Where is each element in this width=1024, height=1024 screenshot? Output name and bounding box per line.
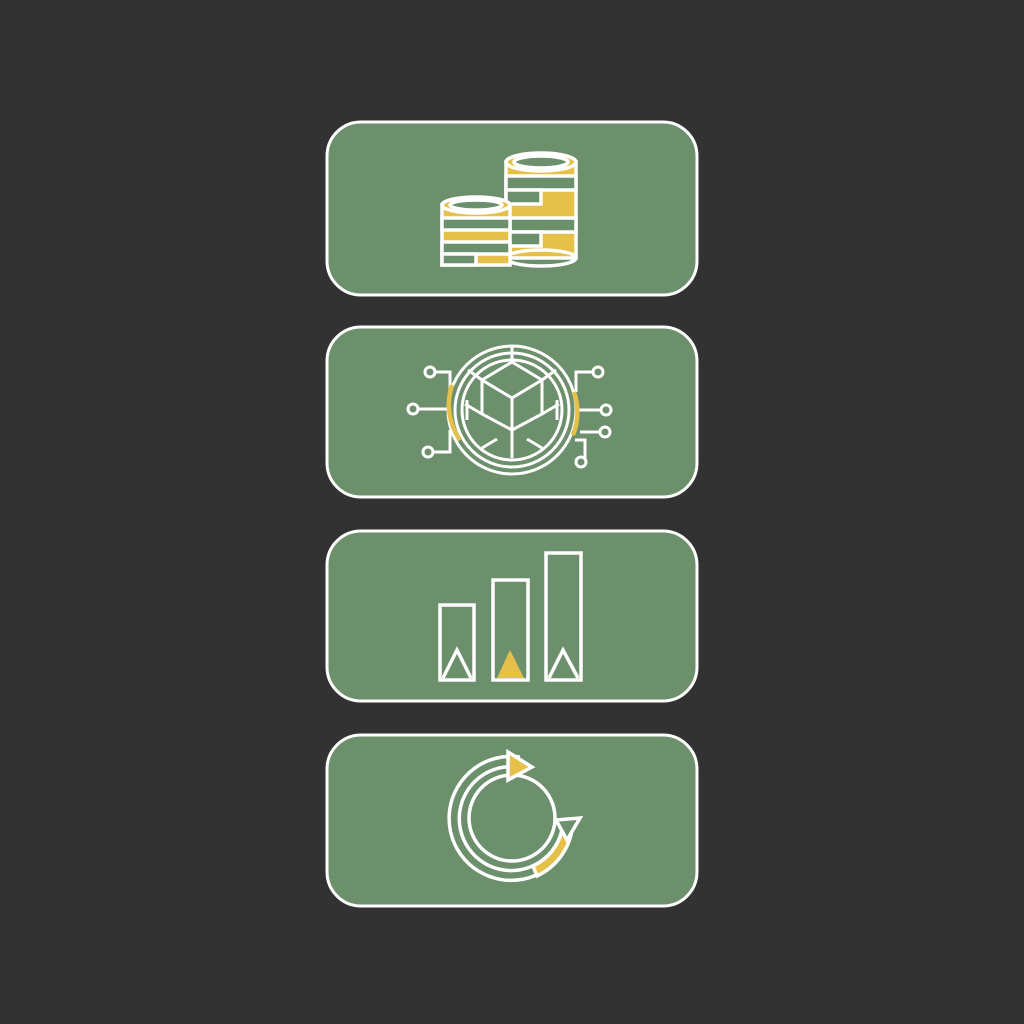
panel: coins	[327, 122, 697, 295]
panel: network	[327, 327, 697, 497]
icon: bar chart	[440, 553, 581, 680]
icon: circuit globe	[408, 345, 611, 474]
icon: coin stacks	[442, 153, 576, 266]
panel: bar chart	[327, 531, 697, 701]
panel: cycle	[327, 735, 697, 906]
icon: cycle arrows	[449, 752, 580, 880]
